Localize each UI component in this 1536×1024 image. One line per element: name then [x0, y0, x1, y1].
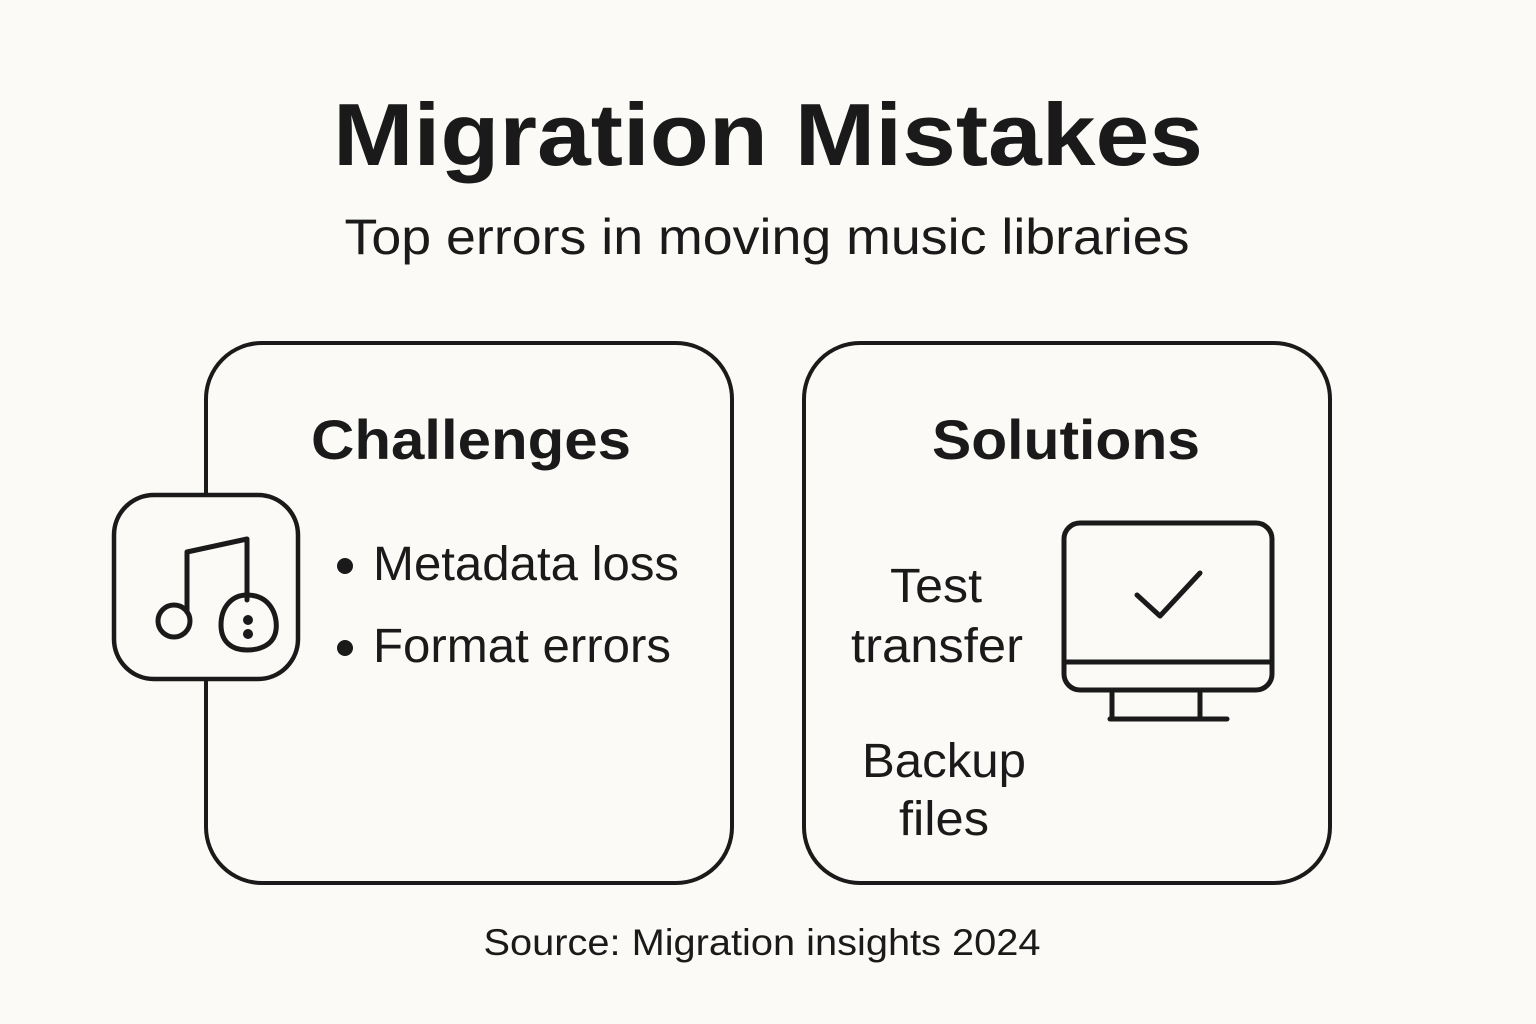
heading: challenges: Challenges: [311, 408, 631, 471]
heading: solutions: Solutions: [932, 408, 1200, 471]
text: backup files: Backup: [862, 735, 1026, 788]
text: test transfer: Test: [890, 560, 982, 613]
text: test transfer: transfer: [851, 620, 1023, 673]
bullet list: challenges: Metadata loss: [373, 538, 679, 591]
source note: Source: Migration insights 2024: [484, 922, 1040, 963]
icon: monitor with checkmark: [1064, 523, 1272, 719]
bullet list: challenges: [337, 538, 679, 673]
panel: challenges: [206, 343, 732, 883]
title: Migration Mistakes: [333, 85, 1203, 184]
text: test transfer: [851, 560, 1023, 673]
bullet list: challenges: Format errors: [373, 620, 671, 673]
subtitle: Top errors in moving music libraries: [344, 209, 1190, 265]
text: backup files: [862, 735, 1026, 846]
icon: music note: [114, 495, 298, 679]
panel: solutions: [804, 343, 1330, 883]
text: backup files: files: [899, 793, 989, 846]
